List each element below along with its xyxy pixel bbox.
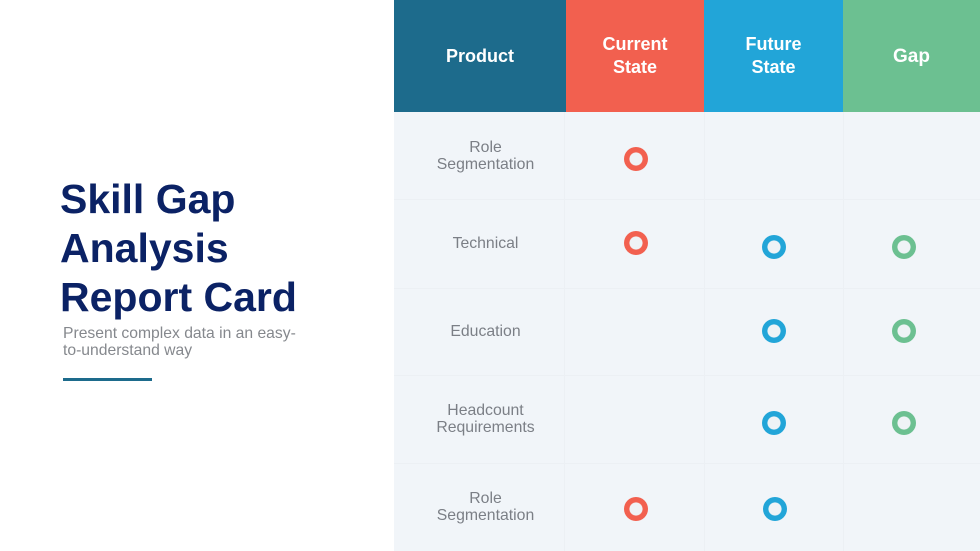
row label: Role Segmentation: Role [469,139,502,156]
row label: Role Segmentation: Segmentation [437,156,534,173]
header: Current State: State [613,57,657,77]
marker: row 5 future [763,497,787,521]
row label: Role Segmentation: Segmentation [437,507,534,524]
subtitle: to-understand way [63,342,192,359]
header: Product [394,0,566,112]
row label: Role Segmentation: Role [469,490,502,507]
title: Report Card [60,274,297,320]
marker: row 3 gap [892,319,916,343]
row label: Role Segmentation [437,139,534,173]
row label: Technical: Technical [453,235,518,252]
title [60,176,297,320]
header: Future State: State [751,57,796,77]
header: Current State: Current [602,34,668,54]
marker: row 3 future [762,319,786,343]
marker: row 2 future [762,235,786,259]
title: Skill Gap [60,176,235,222]
row label: Headcount Requirements [436,402,535,436]
marker: row 1 current [624,147,648,171]
row label: Headcount Requirements: Headcount [447,402,524,419]
marker: row 4 gap [892,411,916,435]
subtitle: Present complex data in an easy- [63,325,296,342]
row label: Headcount Requirements: Requirements [436,419,535,436]
header: Future State [704,0,843,112]
panel: table body [394,112,980,551]
row label: Education: Education [450,323,521,340]
header: Current State [566,0,704,112]
marker: row 2 gap [892,235,916,259]
row label: Role Segmentation [437,490,534,524]
marker: row 4 future [762,411,786,435]
header: Gap: Gap [893,46,930,66]
header: Gap [843,0,980,112]
title: Analysis [60,225,229,271]
header: Future State: Future [746,34,802,54]
accent underline [63,378,152,381]
marker: row 5 current [624,497,648,521]
marker: row 2 current [624,231,648,255]
subtitle [63,325,296,359]
header: Product: Product [446,46,514,66]
